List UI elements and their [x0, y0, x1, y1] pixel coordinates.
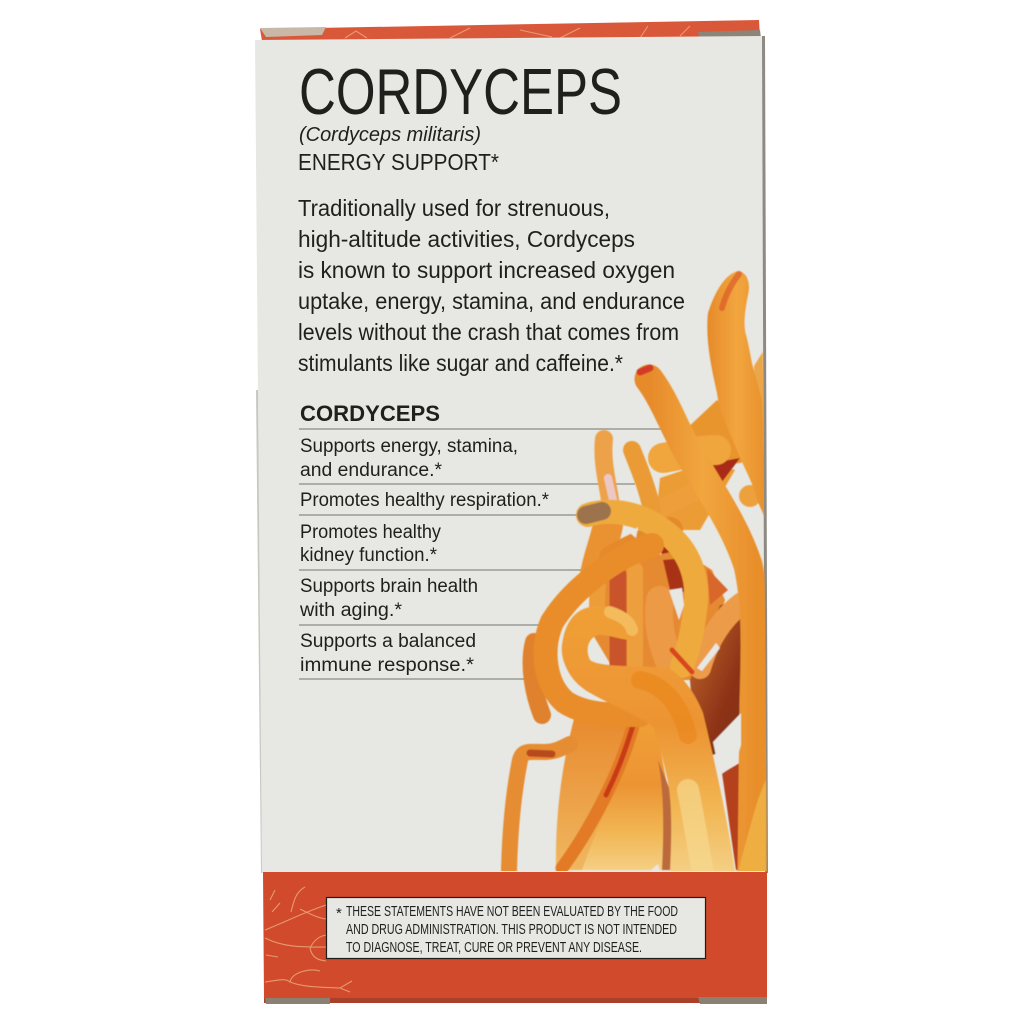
FDA disclaimer box: TO DIAGNOSE, TREAT, CURE OR PREVENT ANY DISEASE.	[346, 939, 642, 956]
description paragraph: Traditionally used for strenuous,	[298, 195, 610, 221]
benefits list: Supports energy, stamina,	[300, 436, 518, 457]
long right tentacle	[649, 379, 755, 875]
mass behind the loop	[590, 550, 725, 680]
red footer band	[263, 872, 767, 998]
panel left edge	[256, 390, 262, 873]
benefits list: with aging.*	[299, 600, 403, 621]
thin red stalk	[562, 722, 634, 868]
lower right column	[738, 780, 766, 872]
gaps showing background	[669, 588, 684, 620]
description paragraph: levels without the crash that comes from	[298, 319, 679, 345]
benefits list: immune response.*	[300, 655, 475, 676]
description paragraph: uptake, energy, stamina, and endurance	[298, 288, 685, 314]
subtitle: ENERGY SUPPORT*	[298, 149, 499, 175]
FDA disclaimer box	[326, 898, 706, 958]
top flap	[260, 20, 761, 41]
description paragraph: is known to support increased oxygen	[298, 257, 675, 283]
outer loop tentacle	[546, 545, 652, 715]
panel right edge	[762, 36, 768, 873]
benefits list	[299, 429, 672, 679]
benefits list: Promotes healthy respiration.*	[300, 490, 550, 511]
FDA disclaimer box: THESE STATEMENTS HAVE NOT BEEN EVALUATED BY THE FOOD	[346, 903, 678, 920]
FDA disclaimer box: *	[336, 905, 342, 922]
hooked tentacle	[588, 512, 696, 666]
description paragraph: stimulants like sugar and caffeine.*	[298, 350, 623, 376]
back stems	[690, 400, 743, 464]
latin name: (Cordyceps militaris)	[299, 124, 481, 146]
footer bottom edge	[264, 997, 767, 1004]
white panel	[255, 36, 767, 873]
benefits list: and endurance.*	[300, 460, 443, 481]
product box back panel	[255, 20, 768, 1004]
description paragraph	[298, 195, 685, 376]
top right tentacle	[707, 271, 766, 520]
title: CORDYCEPS	[299, 55, 622, 128]
lower bodies	[556, 715, 630, 870]
FDA disclaimer box: AND DRUG ADMINISTRATION. THIS PRODUCT IS NOT INTENDED	[346, 921, 677, 938]
benefits list: kidney function.*	[300, 545, 438, 566]
dark shadow region	[689, 604, 742, 756]
small left finger	[532, 642, 542, 715]
thin bottom-left stem	[509, 744, 570, 870]
center stems	[603, 439, 612, 515]
benefits list: Supports a balanced	[300, 631, 476, 652]
curl tentacle	[562, 606, 735, 872]
decorative branch pattern	[265, 887, 352, 992]
benefits list: Supports brain health	[300, 576, 478, 597]
right arm	[700, 603, 742, 668]
description paragraph: high-altitude activities, Cordyceps	[298, 226, 635, 252]
benefits list: Promotes healthy	[300, 522, 441, 543]
benefits heading: CORDYCEPS	[300, 401, 440, 426]
cordyceps mushroom illustration	[509, 271, 766, 875]
